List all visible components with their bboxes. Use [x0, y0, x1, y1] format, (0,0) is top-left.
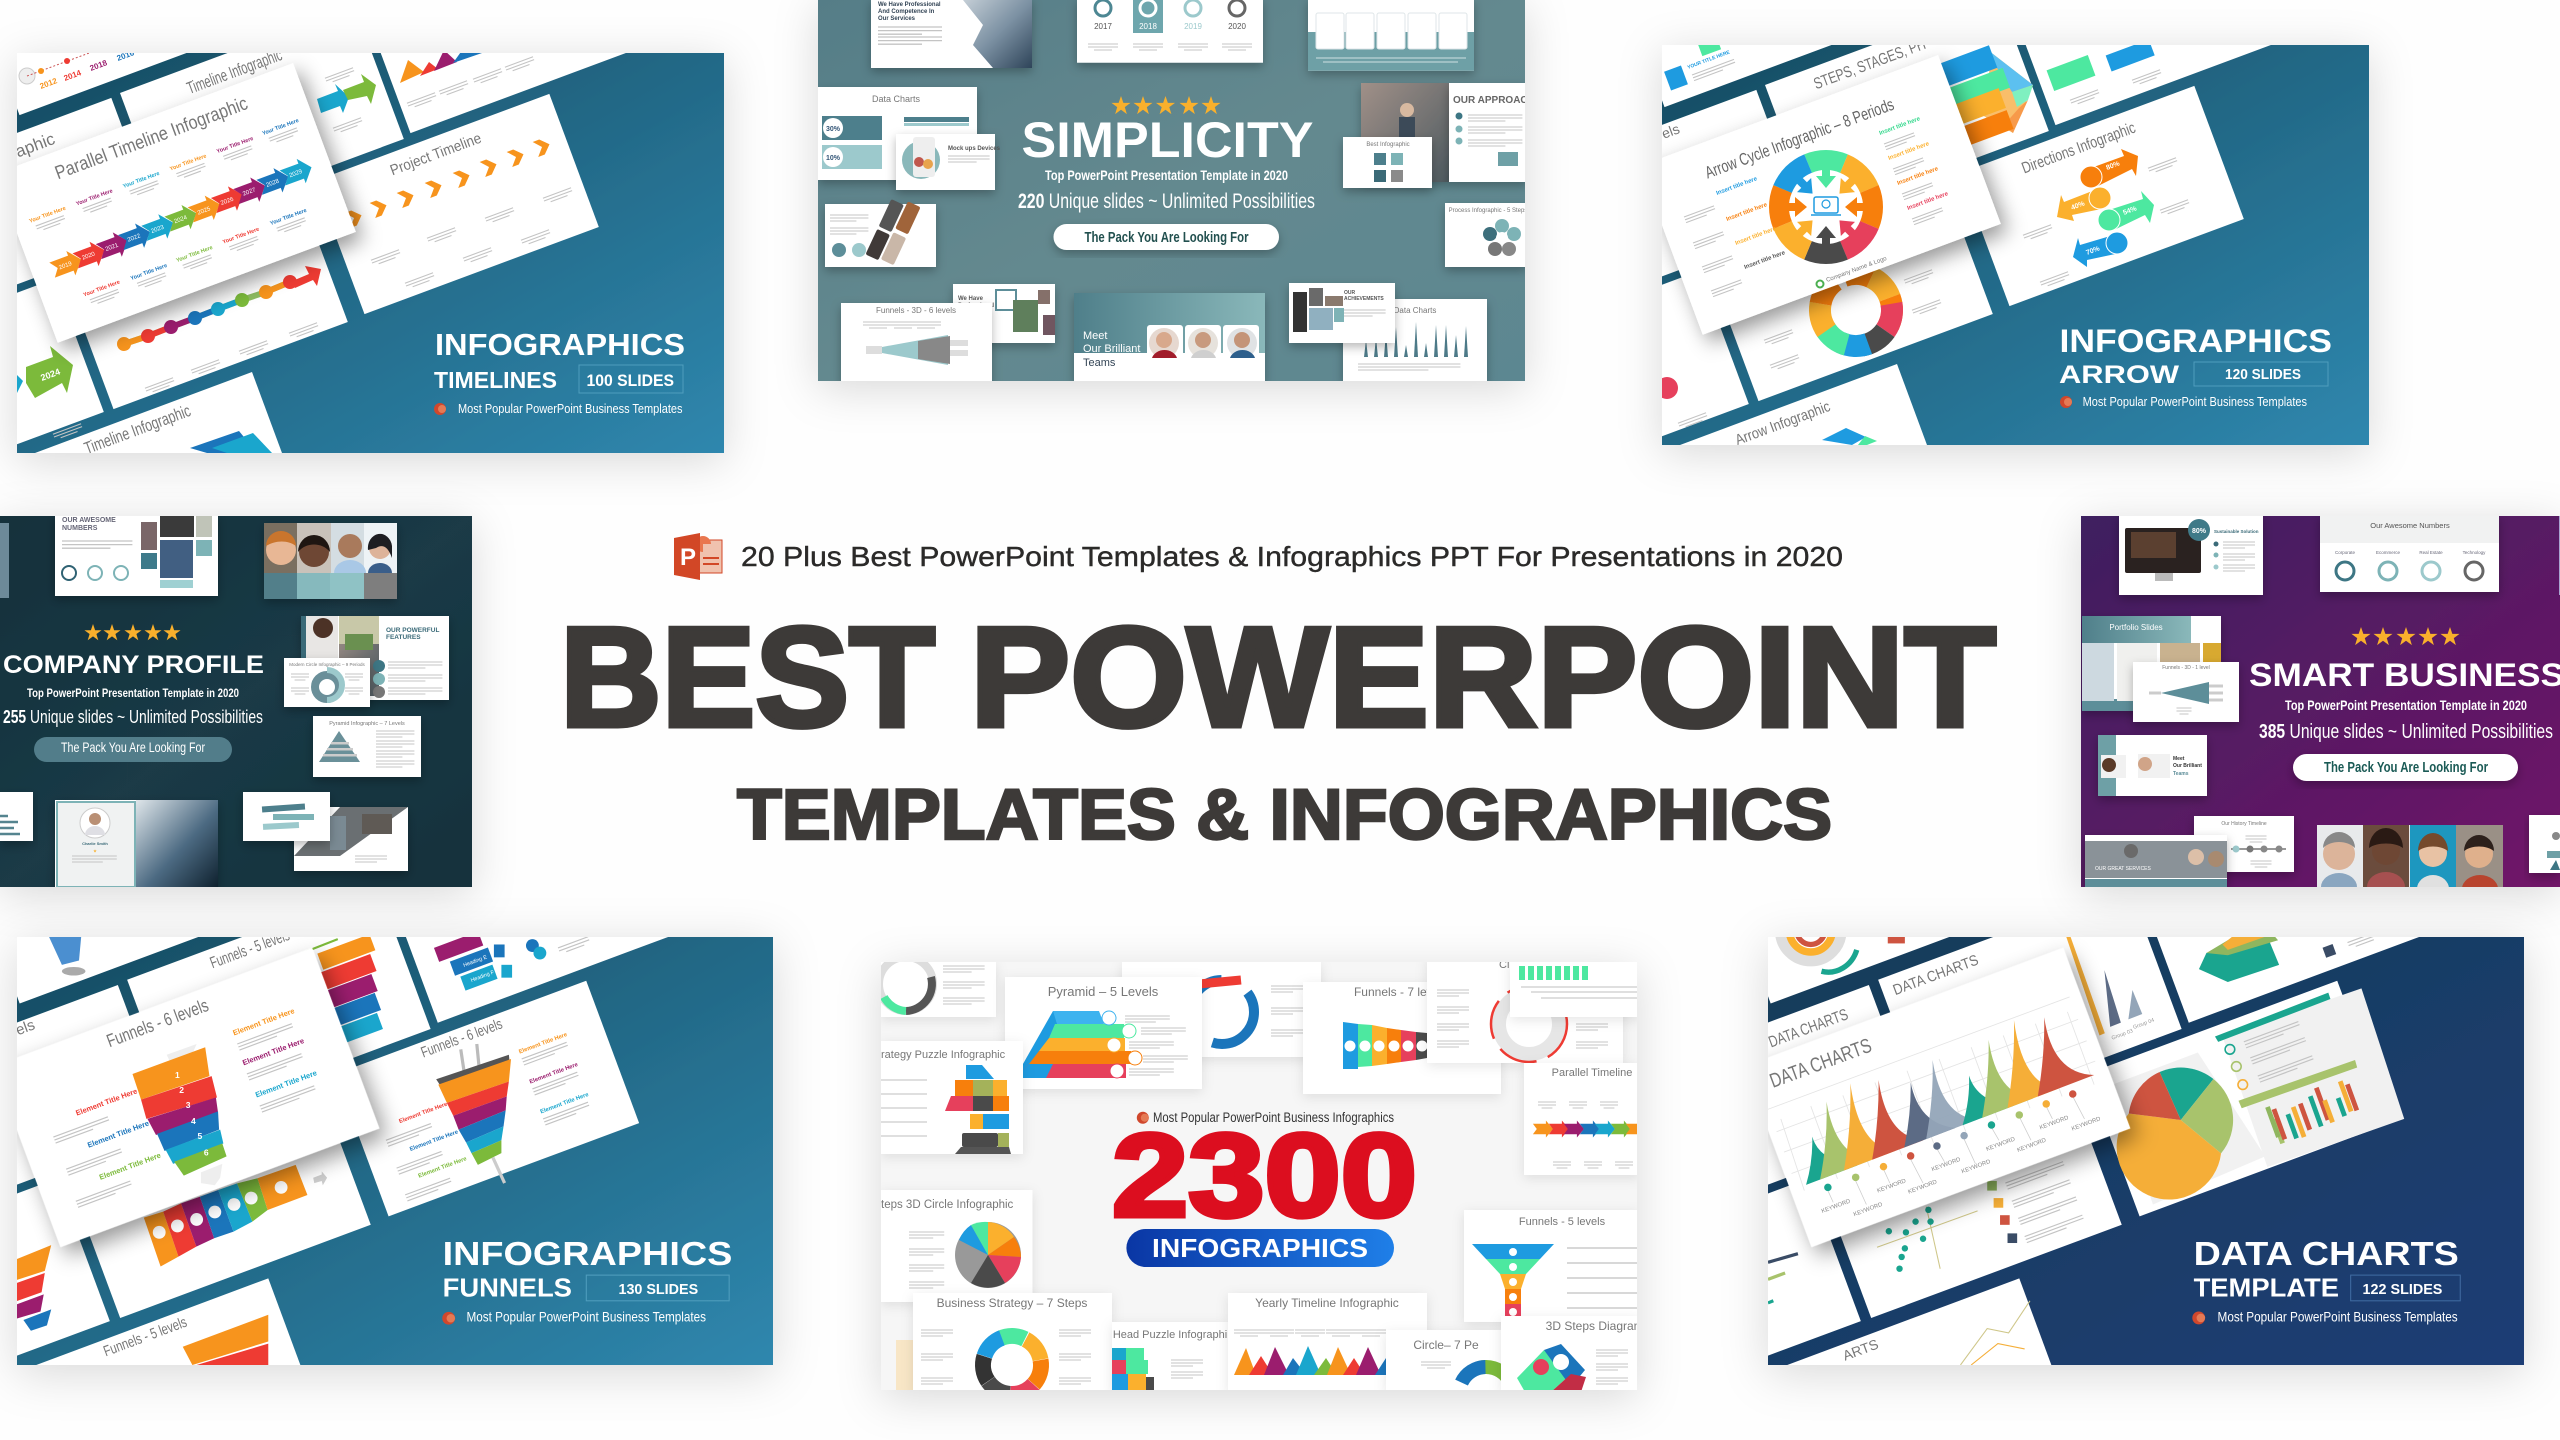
- pill: infographics: [1126, 1229, 1394, 1267]
- slide: five cards: [1308, 0, 1474, 71]
- slide: parallel timeline main: Your Title Here: [216, 136, 254, 155]
- slide: awesome numbers: Ecommerce: [2376, 550, 2400, 555]
- slide: profile: [55, 800, 218, 889]
- slide: awesome numbers: [2320, 514, 2499, 592]
- heading: infographics funnels: [442, 1236, 732, 1325]
- slide: arrow cycle main: Insert title here: [1897, 166, 1940, 187]
- main header: [560, 533, 1996, 855]
- heading: infographics arrow: [2059, 323, 2332, 409]
- slide: process: [1445, 203, 1527, 267]
- button: the pack: [34, 737, 232, 762]
- slide: data charts: 30%: [826, 126, 841, 133]
- panel: infographics arrow: [1465, 0, 2369, 491]
- button: the pack: [2293, 754, 2518, 781]
- slide: meet: [2098, 735, 2207, 796]
- slide: funnel right: Element Title Here: [529, 1062, 580, 1085]
- slide: funnels main: Element Title Here: [86, 1119, 150, 1150]
- heading: infographics timelines: INFOGRAPHICS: [435, 327, 685, 362]
- slide: funnels main: 6: [204, 1147, 209, 1157]
- slide: professional: Our Services: [878, 16, 916, 22]
- slide: left partial title: graphic: [0, 129, 58, 166]
- slide: business strategy: Business Strategy – 7 Steps: [937, 1296, 1087, 1310]
- slide: parallel timeline main: Your Title Here: [130, 263, 168, 282]
- slide: sustainable solution: [2119, 514, 2263, 595]
- slide: bottom funnels: [101, 1314, 268, 1365]
- heading: simplicity: SIMPLICITY: [1022, 112, 1313, 168]
- slide: great services: [2085, 835, 2227, 889]
- slide: team faces: [264, 523, 397, 599]
- slide: pyramid: Pyramid Infographic – 7 Levels: [329, 721, 405, 727]
- slide: funnels 5 levels stack: Funnels - 5 levels: [208, 926, 292, 972]
- button: the pack: The Pack You Are Looking For: [2324, 759, 2488, 776]
- slide: parallel timeline main: 2029: [289, 169, 304, 179]
- slide: portfolio: Portfolio Slides: [2109, 623, 2163, 632]
- slide: funnels 5 levels: [1464, 1210, 1639, 1322]
- number: 2300: 2300: [1112, 1110, 1417, 1242]
- slide: year line: 2014: [63, 68, 83, 83]
- slide: data charts spikes top: [1891, 937, 2155, 1042]
- panel: company profile: [0, 514, 472, 889]
- slide: history timeline: [2194, 816, 2294, 872]
- slide: parallel timeline main: 2023: [150, 224, 166, 235]
- slide: parallel timeline main: Your Title Here: [29, 206, 67, 225]
- heading: data charts template: Most Popular PowerPoint Business Templates: [2218, 1310, 2458, 1325]
- slide: yearly donuts: 2017: [1094, 22, 1112, 31]
- slide: powerful features: [301, 616, 449, 700]
- slide: strategy puzzle: [881, 1041, 1023, 1154]
- slide: timeline infographic: [186, 53, 376, 132]
- panel: simplicity: Funnels - 3D - 6 levels: [876, 306, 956, 315]
- heading: data charts template: [2192, 1236, 2460, 1325]
- slide: year line: [18, 53, 134, 89]
- slide: data charts main: KEYWORD: [1961, 1159, 1991, 1175]
- slide: parallel timeline main: Your Title Here: [269, 208, 308, 227]
- slide: powerful features: FEATURES: [386, 634, 421, 641]
- slide: best infographic: [1343, 137, 1432, 188]
- slide: arrow cycle main: Insert title here: [1744, 250, 1787, 271]
- button: the pack: The Pack You Are Looking For: [1084, 229, 1249, 246]
- slide: yearly donuts: 2019: [1184, 22, 1202, 31]
- heading: infographics timelines: TIMELINES: [434, 367, 557, 393]
- slide: arrow cycle main: Insert title here: [1735, 226, 1778, 247]
- slide: achievements: OUR: [1344, 290, 1356, 296]
- slide: our approach: OUR APPROACH: [1453, 95, 1535, 106]
- slide: yearly timeline: Yearly Timeline Infographic: [1255, 1296, 1399, 1310]
- slide: yearly timeline: [1228, 1293, 1427, 1393]
- slide: head puzzle: Head Puzzle Infographi: [1113, 1329, 1227, 1341]
- panel: infographics timelines: [0, 44, 740, 478]
- slide: yearly donuts: 2020: [1228, 22, 1246, 31]
- title: templates and infographics: TEMPLATES & INFOGRAPHICS: [737, 776, 1832, 855]
- slide: funnels 5 levels: Funnels - 5 levels: [1519, 1216, 1606, 1228]
- slide: professional: And Competence In: [878, 9, 935, 15]
- slide: powerful features: OUR POWERFUL: [386, 627, 439, 634]
- slide: funnel right: Element Title Here: [418, 1156, 468, 1180]
- slide: arrow cycle main: Insert title here: [1726, 202, 1769, 223]
- slide: funnels main: Funnels - 6 levels: [104, 995, 211, 1051]
- slide: left green arrow: 2024: [39, 367, 61, 383]
- slide: parallel timeline main: Your Title Here: [122, 171, 161, 190]
- slide: left small bars: [0, 792, 33, 841]
- slide: meet the team: Meet: [1083, 330, 1107, 342]
- slide: sustainable solution: Sustainable Solution: [2214, 529, 2259, 534]
- slide: colour bands: [144, 1165, 327, 1267]
- slide: history timeline: Our History Timeline: [2221, 821, 2267, 827]
- slide: arrow cycle main: Company Name & Logo: [1826, 256, 1888, 284]
- slide: funnels main: 1: [175, 1070, 180, 1080]
- slide: parallel timeline main: 2027: [242, 187, 257, 198]
- slide: mock ups: Mock ups Devices: [948, 146, 1001, 152]
- slide: parallel timeline main: 2019: [58, 261, 73, 271]
- slide: arrow cycle main: Insert title here: [1716, 176, 1759, 197]
- slide: funnels 7 levels: [1303, 982, 1501, 1094]
- heading: data charts template: 122 SLIDES: [2363, 1281, 2442, 1298]
- slide: meet the team: Our Brilliant: [1083, 343, 1140, 355]
- slide: professional: [871, 0, 1032, 68]
- slide: meet: Teams: [2173, 771, 2189, 777]
- heading: simplicity: [1018, 112, 1315, 213]
- slide: achievements: ACHIEVEMENTS: [1344, 296, 1384, 302]
- slide: top-right boxes: [2047, 39, 2162, 106]
- heading: infographics funnels: 130 SLIDES: [618, 1281, 698, 1298]
- slide: arrow cycle main: Arrow Cycle Infographic – 8 Periods: [1702, 95, 1897, 182]
- slide: left bars: [1768, 1254, 1798, 1303]
- slide: meet the team: Teams: [1083, 357, 1116, 369]
- heading: simplicity: 220 Unique slides ~ Unlimited Possibilities: [1018, 190, 1315, 213]
- slide: meet: Meet: [2173, 756, 2185, 762]
- slide: data charts: [818, 87, 977, 180]
- slide: our approach: [1361, 83, 1535, 182]
- slide: year line: 2016: [116, 48, 136, 63]
- slide: arrow cycle main: Insert title here: [1879, 116, 1922, 137]
- slide: parallel timeline main: Your Title Here: [169, 153, 207, 172]
- slide: numbers: OUR AWESOME: [62, 517, 116, 524]
- slide: parallel timeline main: Parallel Timeline Infographic: [52, 93, 251, 184]
- beige strip: [896, 1340, 913, 1390]
- slide: top-left icon: [1664, 36, 1736, 91]
- slide: top-right mountains: [400, 49, 535, 109]
- slide: data charts main: KEYWORD: [2071, 1116, 2102, 1132]
- slide: circle 7 periods: [1427, 957, 1623, 1063]
- slide: parallel timeline main: [0, 63, 356, 343]
- slide: funnel right: Funnels - 6 levels: [419, 1016, 505, 1061]
- slide: funnel right: Element Title Here: [409, 1129, 460, 1153]
- stars: [84, 624, 181, 640]
- stars: [2351, 627, 2460, 645]
- slide: portfolio: [2082, 616, 2221, 711]
- slide: right sliver: [2559, 516, 2560, 595]
- slide: right lower: [2529, 815, 2560, 873]
- slide: pyramid: [313, 716, 421, 777]
- slide: left green arrow: [17, 346, 82, 438]
- title: best: BEST: [560, 598, 935, 757]
- slide: pyramid 5 levels: Pyramid – 5 Levels: [1048, 984, 1159, 999]
- pill: infographics: INFOGRAPHICS: [1152, 1233, 1368, 1263]
- slide: left partial: [1653, 120, 1708, 429]
- slide: steps 3D: [1812, 36, 2033, 150]
- title: powerpoint: POWERPOINT: [970, 598, 1996, 757]
- slide: directions: Directions Infographic: [2020, 120, 2138, 177]
- heading: infographics arrow: Most Popular PowerPoint Business Templates: [2083, 394, 2307, 409]
- slide: data charts main: DATA CHARTS: [1767, 1035, 1875, 1093]
- icon: powerpoint: P: [680, 544, 696, 571]
- slide: partial title left: vels: [6, 1016, 37, 1042]
- slide: numbers: NUMBERS: [62, 525, 98, 532]
- subtitle: 20 Plus Best PowerPoint Templates & Infographics PPT For Presentations in 2020: [741, 541, 1843, 572]
- slide: best infographic: Best Infographic: [1366, 142, 1410, 148]
- slide: project timeline: [345, 130, 573, 289]
- slide: 3D steps: [1501, 1316, 1640, 1392]
- slide: star ring: [1122, 962, 1321, 1057]
- slide: funnels main: Element Title Here: [74, 1086, 139, 1118]
- slide: awesome numbers: Our Awesome Numbers: [2370, 521, 2450, 530]
- slide: parallel timeline main: 2024: [173, 215, 189, 225]
- panel: data charts template: [1557, 768, 2524, 1414]
- slide: parallel timeline main: 2026: [220, 196, 235, 207]
- slide: funnels main: [0, 948, 379, 1247]
- slide: data charts main: KEYWORD: [1853, 1202, 1883, 1218]
- slide: left funnel: [12, 1245, 51, 1331]
- slide: ring top-left: [879, 957, 996, 1017]
- slide: bottom funnels: Funnels - 5 levels: [101, 1314, 189, 1360]
- slide: mock ups: [896, 134, 1001, 190]
- slide: yearly donuts: [1077, 0, 1263, 63]
- heading: smart business: [2249, 657, 2560, 743]
- heading: data charts template: TEMPLATE: [2194, 1275, 2339, 1303]
- slide: funnels main: 4: [191, 1116, 196, 1126]
- slide: circle 7: Circle– 7 Pe: [1413, 1338, 1479, 1352]
- slide: directions: 70%: [2085, 245, 2102, 257]
- panel: smart business: [2081, 514, 2560, 889]
- slide: parallel timeline main: 2028: [266, 178, 281, 189]
- slide: funnels main: Element Title Here: [241, 1036, 305, 1067]
- slide: bottom lines: [1840, 1301, 2030, 1365]
- tagline: most popular: Most Popular PowerPoint Business Infographics: [1153, 1110, 1394, 1125]
- panel: 2300 infographics: [879, 957, 1646, 1430]
- slide: funnels main: Element Title Here: [254, 1068, 318, 1099]
- slide: pyramid 5 levels: [1005, 977, 1202, 1089]
- heading: infographics arrow: ARROW: [2059, 361, 2179, 389]
- slide: funnels main: 3: [186, 1100, 191, 1110]
- slide: awesome numbers: Real Estate: [2419, 550, 2443, 555]
- slide: circle 7 periods: Circle: [1499, 959, 1527, 971]
- photo: team faces: [2317, 825, 2503, 889]
- slide: directions: 80%: [2105, 160, 2122, 172]
- slide: left partial: vels: [1653, 120, 1682, 144]
- slide: funnel right: Element Title Here: [540, 1092, 590, 1115]
- slide: funnels 3D: We Have: [958, 296, 984, 302]
- slide: business strategy: [913, 1293, 1112, 1406]
- slide: steps 3D: STEPS, STAGES, PH: [1812, 36, 1928, 93]
- slide: people row: [1510, 959, 1640, 1017]
- slide: numbers: [55, 514, 218, 596]
- slide: funnels 3D: [953, 284, 1055, 343]
- slide: parallel timeline main: Your Title Here: [175, 245, 214, 264]
- slide: funnels 3D: [2133, 662, 2239, 722]
- heading: data charts template: DATA CHARTS: [2194, 1236, 2459, 1273]
- heading: smart business: SMART BUSINESS: [2249, 657, 2560, 693]
- slide: pie chart: [2112, 988, 2404, 1204]
- slide: process: Process Infographic - 5 Steps: [1449, 208, 1527, 214]
- slide: ring with elements: [1764, 260, 1942, 371]
- slide: parallel timeline main: Your Title Here: [222, 227, 260, 246]
- slide: professional: We Have Professional: [878, 2, 941, 8]
- heading: infographics timelines: [434, 327, 685, 416]
- heading: infographics timelines: Most Popular PowerPoint Business Templates: [458, 401, 683, 416]
- slide: data charts: Data Charts: [872, 94, 921, 104]
- slide: data charts main: KEYWORD: [1931, 1157, 1961, 1173]
- slide: profile: Charlie Smith: [82, 841, 108, 846]
- slide: data charts main: KEYWORD: [1985, 1137, 2016, 1153]
- slide: 3D box: [49, 937, 85, 976]
- slide: meet the team: [1074, 293, 1265, 383]
- button: the pack: [1054, 224, 1279, 250]
- heading: infographics funnels: Most Popular PowerPoint Business Templates: [467, 1310, 706, 1325]
- slide: phones: [825, 195, 936, 267]
- slide: arrow cycle main: Insert title here: [1888, 141, 1931, 162]
- slide: data charts main: [1744, 948, 2130, 1247]
- slide: sustainable solution: 80%: [2192, 528, 2207, 535]
- heading: infographics timelines: 100 SLIDES: [586, 372, 674, 390]
- slide: circle 7: [1386, 1330, 1522, 1430]
- slide: directions: 54%: [2122, 205, 2139, 217]
- button: the pack: The Pack You Are Looking For: [61, 739, 205, 755]
- slide: funnels main: 5: [197, 1131, 202, 1141]
- slide: funnels 7 levels: Funnels - 7 levels: [1354, 985, 1448, 999]
- slide: parallel timeline main: Your Title Here: [83, 279, 121, 299]
- heading: simplicity: Top PowerPoint Presentation Template in 2020: [1045, 167, 1288, 183]
- slide: funnels 3D: Professional: [958, 303, 994, 309]
- heading: company profile: [3, 651, 264, 727]
- slide: funnels main: Element Title Here: [232, 1006, 296, 1037]
- slide: funnel right: Element Title Here: [518, 1032, 569, 1056]
- slide: data charts spikes top: Group 03: [2111, 1028, 2134, 1042]
- slide: project timeline: Project Timeline: [388, 130, 484, 179]
- stars: [1111, 96, 1221, 114]
- slide: bottom title: Timeline Infographic: [82, 401, 194, 458]
- slide: scatter: [1877, 1162, 2085, 1272]
- slide: data charts main: KEYWORD: [1876, 1178, 1907, 1195]
- slide: partial data charts: DATA CHARTS: [1766, 1005, 1851, 1051]
- slide: circle infographic: Modern Circle Infographic – 9 Periods: [289, 662, 366, 667]
- icon: powerpoint: [674, 533, 722, 580]
- slide: data charts main: KEYWORD: [1907, 1179, 1938, 1196]
- slide: data charts main: KEYWORD: [2017, 1138, 2047, 1154]
- slide: data charts main: KEYWORD: [2039, 1115, 2069, 1131]
- slide: great services: OUR GREAT SERVICES: [2095, 866, 2152, 872]
- slide: timeline infographic: Timeline Infographic: [184, 45, 285, 98]
- slide: parallel timeline main: 2020: [81, 251, 97, 262]
- slide: steps 3D circle: [881, 1190, 1032, 1302]
- slide: steps 3D circle: teps 3D Circle Infographic: [881, 1199, 1014, 1211]
- heading: infographics arrow: INFOGRAPHICS: [2060, 323, 2332, 359]
- slide: parallel timeline main: 2021: [105, 242, 120, 253]
- slide: funnels main: 2: [179, 1085, 184, 1095]
- slide: top-left icon: YOUR TITLE HERE: [1687, 49, 1732, 71]
- heading: infographics arrow: 120 SLIDES: [2225, 366, 2301, 383]
- slide: arrow cycle main: Insert title here: [1907, 191, 1950, 212]
- slide: parallel timeline main: 2025: [197, 206, 212, 217]
- slide: dots timeline: [117, 266, 321, 394]
- slide: bottom lines: ARTS: [1840, 1336, 1881, 1364]
- slide: left clip: [0, 523, 9, 598]
- slide: head puzzle: [1112, 1322, 1228, 1392]
- slide: data charts spikes top: DATA CHARTS: [1891, 952, 1981, 999]
- slide: data charts: 10%: [826, 155, 841, 162]
- slide: yearly donuts: 2018: [1139, 22, 1157, 31]
- slide: arcs: [1781, 901, 1905, 972]
- slide: funnel right: Element Title Here: [398, 1101, 449, 1125]
- slide: year line: 2012: [39, 76, 59, 91]
- slide: parallel timeline: Parallel Timeline: [1552, 1067, 1632, 1079]
- slide: parallel timeline main: Your Title Here: [262, 118, 300, 137]
- panel: infographics funnels: [0, 768, 773, 1414]
- slide: awesome numbers: Corporate: [2335, 550, 2356, 555]
- slide: data charts spikes top: Group 04: [2132, 1018, 2155, 1031]
- slide: 3D steps: 3D Steps Diagran: [1546, 1319, 1640, 1333]
- slide: data charts main: KEYWORD: [1821, 1199, 1851, 1215]
- slide: funnel headings: Heading E: [463, 954, 488, 969]
- slide: parallel timeline main: 2022: [127, 233, 142, 244]
- heading: company profile: COMPANY PROFILE: [3, 651, 264, 679]
- slide: strategy puzzle: rategy Puzzle Infographic: [881, 1049, 1006, 1061]
- slide: achievements: [1289, 283, 1395, 343]
- slide: help you: [243, 792, 408, 871]
- slide: year line: 2018: [89, 58, 109, 73]
- heading: company profile: 255 Unique slides ~ Unlimited Possibilities: [3, 707, 263, 727]
- slide: funnels 5 levels stack: [208, 926, 383, 1043]
- heading: company profile: Top PowerPoint Presentation Template in 2020: [27, 686, 239, 700]
- slide: directions: 40%: [2070, 200, 2087, 212]
- slide: 3D area chart: [2199, 928, 2380, 982]
- slide: directions: [2020, 120, 2190, 288]
- slide: parallel timeline main: Your Title Here: [75, 188, 114, 207]
- slide: funnel right: [386, 1016, 590, 1201]
- slide: meet: Our Brilliant: [2173, 763, 2202, 769]
- slide: funnel headings: Heading F: [470, 969, 496, 984]
- panel: simplicity: [818, 0, 1535, 383]
- slide: bottom title: [83, 406, 272, 453]
- slide: parallel timeline: [1524, 1063, 1646, 1175]
- slide: funnels 3D: Funnels - 3D - 1 level: [2162, 665, 2210, 671]
- slide: funnel headings: [434, 931, 590, 991]
- slide: data charts spikes: Data Charts: [1394, 306, 1436, 315]
- slide: data charts spikes: [1343, 299, 1487, 383]
- slide: circle infographic: [284, 658, 370, 707]
- heading: infographics funnels: FUNNELS: [443, 1275, 572, 1303]
- slide: bottom title: Arrow Infographic: [1733, 398, 1833, 449]
- heading: infographics funnels: INFOGRAPHICS: [443, 1236, 732, 1273]
- slide: funnels main: Element Title Here: [98, 1151, 162, 1182]
- slide: arrow cycle main: [1640, 55, 2001, 335]
- slide: awesome numbers: Technology: [2463, 550, 2486, 555]
